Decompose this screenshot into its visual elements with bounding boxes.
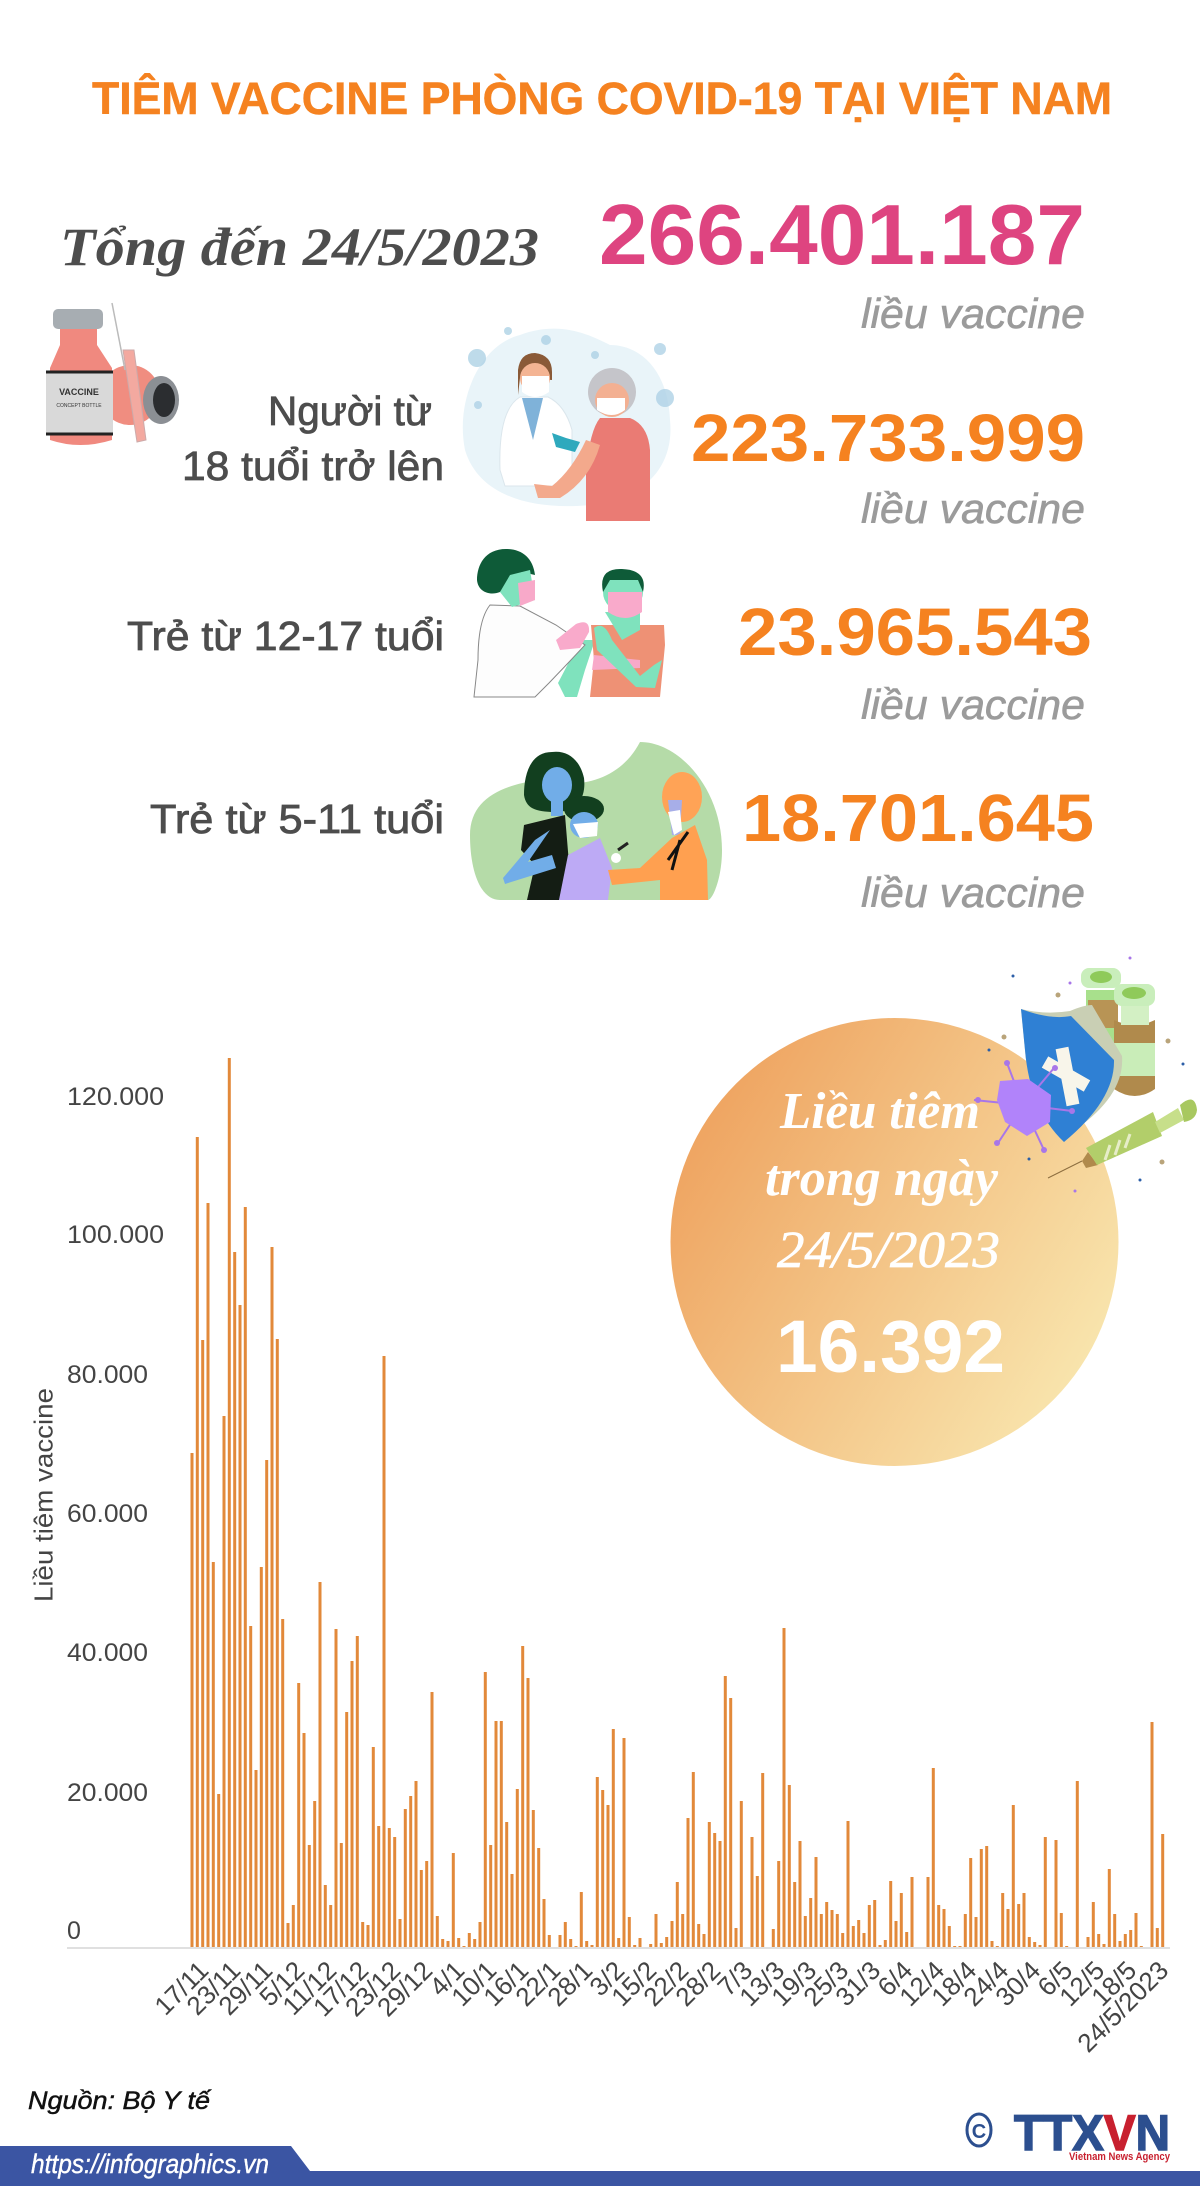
x axis labels: 7/3	[711, 1955, 758, 2002]
x axis labels: 6/5	[1031, 1955, 1078, 2002]
panel: age 5-11	[150, 742, 1094, 916]
total label: Tổng đến 24/5/2023	[60, 217, 539, 277]
y axis labels: 40.000	[67, 1639, 148, 1667]
x axis labels: 3/2	[583, 1955, 630, 2002]
icon: doctor vaccinating elderly woman	[463, 327, 674, 521]
x axis labels: 18/5	[1085, 1955, 1142, 2012]
x axis labels: 24/4	[957, 1955, 1014, 2012]
x axis labels: 25/3	[797, 1955, 854, 2012]
x axis labels: 23/12	[339, 1955, 406, 2022]
copyright mark	[967, 2114, 991, 2146]
number: 23.965.543	[738, 595, 1092, 670]
panel: age 12-17	[127, 549, 1092, 728]
x axis labels: 13/3	[733, 1955, 790, 2012]
icon: mother, child and doctor on green blob	[470, 742, 722, 900]
x axis line	[67, 1947, 1170, 1949]
x axis labels: 29/12	[371, 1955, 438, 2022]
x axis labels: 5/12	[253, 1955, 310, 2012]
x axis labels: 31/3	[829, 1955, 886, 2012]
panel: adults 18+	[182, 327, 1085, 532]
callout text line 2: trong ngày	[765, 1150, 999, 1207]
panel: total doses	[60, 188, 1085, 337]
x axis labels: 24/5/2023	[1071, 1955, 1174, 2058]
bar chart: daily doses	[28, 1058, 1174, 2058]
icon: virus	[974, 1060, 1075, 1153]
x axis labels: 4/1	[423, 1955, 470, 2002]
callout date: 24/5/2023	[777, 1222, 1000, 1279]
bars	[192, 1058, 1163, 1947]
unit: liều vaccine	[861, 869, 1085, 916]
source note: Nguồn: Bộ Y tế	[28, 2087, 212, 2115]
x axis labels: 22/2	[637, 1955, 694, 2012]
x axis labels: 15/2	[605, 1955, 662, 2012]
x axis labels: 28/2	[669, 1955, 726, 2012]
circle background	[670, 1018, 1118, 1466]
icon: syringe	[1048, 1100, 1197, 1178]
copyright mark: C	[972, 2121, 986, 2143]
y axis labels: 20.000	[67, 1779, 148, 1807]
icon: vaccine bottle	[46, 303, 179, 445]
x axis labels	[148, 1955, 1174, 2058]
x axis labels: 12/5	[1053, 1955, 1110, 2012]
footer band	[0, 2146, 1200, 2186]
total unit: liều vaccine	[861, 290, 1085, 337]
label: Trẻ từ 12-17 tuổi	[127, 613, 444, 659]
icon: vaccine vials	[1081, 968, 1155, 1096]
decorative dots	[988, 956, 1184, 1192]
logo: TTXVN	[967, 2105, 1171, 2163]
icon: vaccine bottle: VACCINE	[59, 387, 99, 397]
number: 18.701.645	[742, 781, 1094, 856]
x axis labels: 10/1	[445, 1955, 502, 2012]
y axis labels	[67, 1083, 164, 1945]
icon: shield with cross	[1021, 1005, 1122, 1142]
x axis labels: 23/11	[180, 1955, 246, 2021]
y axis labels: 60.000	[67, 1500, 148, 1528]
wordmark: TTXVN	[1014, 2105, 1170, 2161]
tagline: Vietnam News Agency	[1069, 2151, 1171, 2163]
icon: doctor and teenager	[474, 549, 665, 697]
x axis labels: 12/4	[893, 1955, 950, 2012]
y axis title: Liều tiêm vaccine	[28, 1388, 58, 1602]
y axis labels: 80.000	[67, 1361, 148, 1389]
x axis labels: 19/3	[765, 1955, 822, 2012]
callout number: 16.392	[776, 1305, 1005, 1388]
x axis labels: 17/11	[148, 1955, 214, 2021]
y axis labels: 120.000	[67, 1083, 164, 1111]
x axis labels: 6/4	[871, 1955, 918, 2002]
icon: vaccine bottle: CONCEPT BOTTLE	[56, 403, 102, 409]
total number: 266.401.187	[599, 188, 1085, 283]
unit: liều vaccine	[861, 681, 1085, 728]
x axis labels: 28/1	[541, 1955, 598, 2012]
number: 223.733.999	[691, 401, 1085, 476]
x axis labels: 22/1	[509, 1955, 566, 2012]
x axis labels: 11/12	[276, 1955, 342, 2021]
callout text line 1: Liều tiêm	[779, 1083, 980, 1140]
x axis labels: 29/11	[212, 1955, 278, 2021]
label line 2: 18 tuổi trở lên	[182, 443, 444, 489]
unit: liều vaccine	[861, 485, 1085, 532]
x axis labels: 16/1	[477, 1955, 534, 2012]
y axis labels: 0	[67, 1917, 81, 1945]
y axis labels: 100.000	[67, 1221, 164, 1249]
label: Người từ	[268, 388, 432, 434]
callout: doses on 24/5/2023	[670, 1018, 1118, 1466]
x axis labels: 17/12	[307, 1955, 374, 2022]
label: Trẻ từ 5-11 tuổi	[150, 796, 444, 842]
title: TIÊM VACCINE PHÒNG COVID-19 TẠI VIỆT NAM	[92, 73, 1112, 124]
x axis labels: 18/4	[925, 1955, 982, 2012]
x axis labels: 30/4	[989, 1955, 1046, 2012]
website url: https://infographics.vn	[31, 2149, 269, 2179]
